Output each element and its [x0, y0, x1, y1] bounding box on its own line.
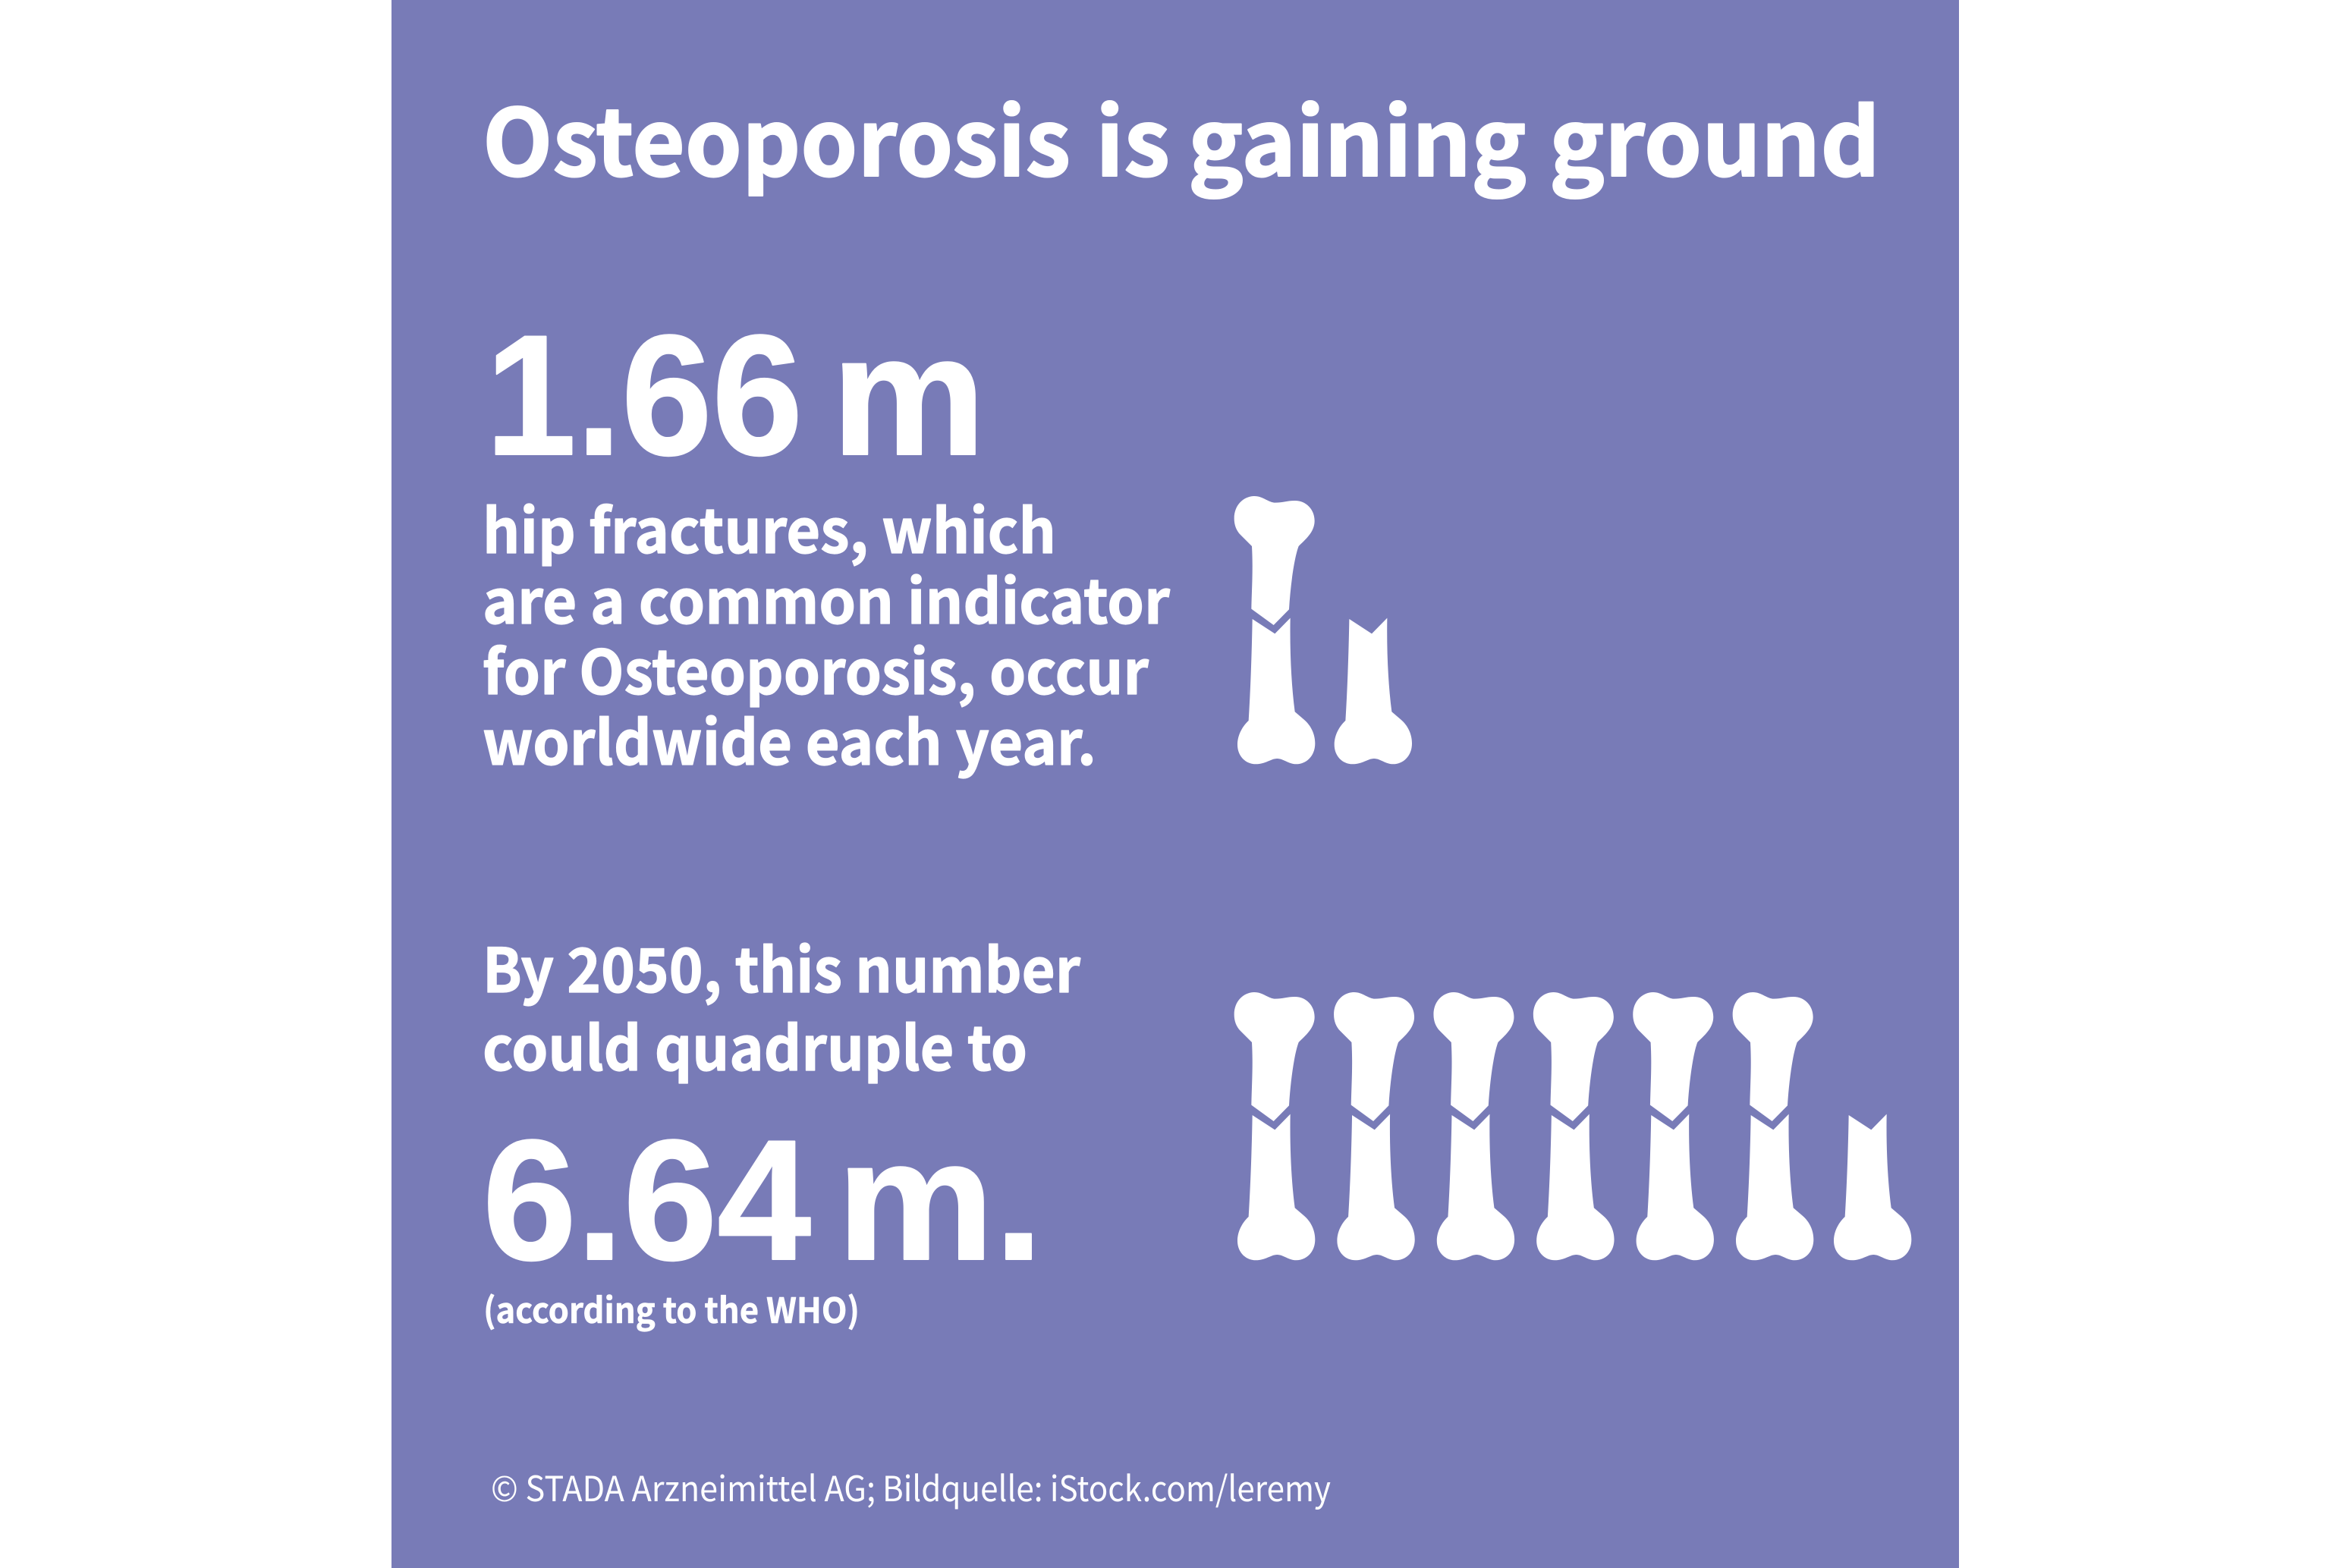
big number: 6.64 m.: m.	[837, 1104, 1043, 1296]
big number: 1.66 m: 1.66	[486, 299, 803, 491]
big number: 6.64 m.: 6.64	[483, 1104, 811, 1296]
title	[483, 69, 1880, 203]
text block: by 2050 projection: could quadruple to	[483, 1001, 1027, 1089]
title: ground	[1549, 69, 1880, 203]
footer credit: © STADA Arzneimittel AG;	[491, 1462, 876, 1512]
text block: by 2050 projection: By 2050, this number	[483, 922, 1080, 1010]
big number: 1.66 m	[486, 299, 986, 491]
text block: hip fractures description: for Osteoporosis, occur	[483, 624, 1149, 712]
text block: by 2050 projection	[483, 922, 1080, 1089]
icon: one and a half broken bones (1.66 m)	[1234, 496, 1412, 764]
icon: six and a half broken bones (6.64 m)	[1234, 992, 1911, 1260]
title: gaining	[1188, 69, 1527, 203]
title: is	[1096, 69, 1170, 203]
title: Osteoporosis	[483, 69, 1071, 203]
big number: 6.64 m.	[483, 1104, 1043, 1296]
footer credit: Bildquelle: iStock.com/leremy	[882, 1462, 1331, 1512]
text block: hip fractures description: are a common indicator	[483, 554, 1170, 642]
text block: hip fractures description	[483, 483, 1170, 783]
big number: 1.66 m: m	[832, 299, 986, 491]
source note: according to the WHO: (according to the WHO)	[483, 1284, 860, 1334]
footer credit	[491, 1462, 1331, 1512]
text block: hip fractures description: hip fractures, which	[483, 483, 1056, 571]
panel: purple background	[391, 0, 1959, 1568]
text block: hip fractures description: worldwide each year.	[483, 695, 1096, 783]
